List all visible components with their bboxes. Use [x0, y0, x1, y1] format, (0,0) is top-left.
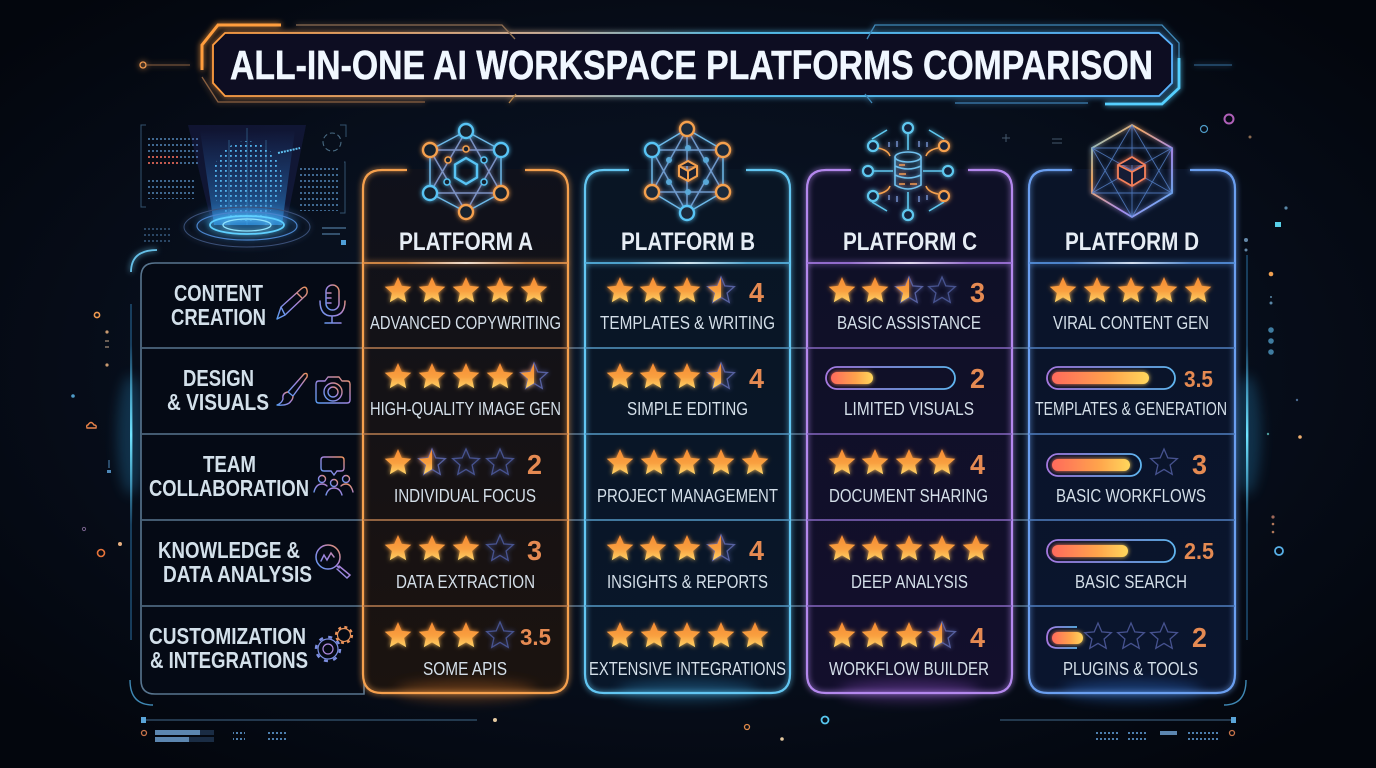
C row 3: 4	[970, 449, 985, 480]
icon: platform D hexagon cube	[1092, 125, 1172, 217]
D row 2	[1035, 366, 1227, 419]
C row 5: WORKFLOW BUILDER	[829, 658, 989, 679]
category: design and visuals: & VISUALS	[167, 389, 269, 415]
category: knowledge and data analysis: KNOWLEDGE &	[158, 537, 300, 563]
B row 1: TEMPLATES & WRITING	[600, 312, 775, 333]
D row 5: PLUGINS & TOOLS	[1063, 658, 1198, 679]
A row 5	[385, 622, 551, 679]
title banner	[140, 25, 1232, 104]
C row 4: DEEP ANALYSIS	[851, 571, 968, 592]
A row 2: HIGH-QUALITY IMAGE GEN	[370, 398, 561, 419]
category: content creation: CONTENT	[174, 280, 263, 306]
C row 2: 2	[970, 363, 985, 394]
D row 1: VIRAL CONTENT GEN	[1053, 312, 1209, 333]
D row 5: 2	[1192, 622, 1207, 653]
D row 2: 3.5	[1184, 366, 1213, 392]
D row 1	[1050, 277, 1211, 333]
C row 2: LIMITED VISUALS	[844, 398, 974, 419]
banner title text: ALL-IN-ONE AI WORKSPACE PLATFORMS COMPARISON	[230, 42, 1153, 88]
category: team collaboration: TEAM	[203, 451, 256, 477]
A row 2	[370, 363, 561, 419]
category: design and visuals: DESIGN	[183, 365, 254, 391]
column: platform C	[807, 123, 1012, 701]
category: customization and integrations: & INTEGRATIONS	[150, 647, 308, 673]
D row 3: BASIC WORKFLOWS	[1056, 485, 1206, 506]
heading: platform C: PLATFORM C	[843, 228, 977, 256]
D row 4	[1047, 538, 1214, 592]
A row 5: 3.5	[520, 624, 551, 650]
footer status bars	[141, 716, 1236, 742]
progress bar	[1047, 454, 1141, 476]
B row 3	[597, 449, 778, 506]
B row 1	[600, 277, 775, 333]
A row 4: 3	[527, 535, 542, 566]
A row 4	[385, 535, 542, 592]
category: knowledge and data analysis	[158, 537, 350, 587]
A row 4: DATA EXTRACTION	[396, 571, 535, 592]
B row 2: 4	[749, 363, 764, 394]
D row 4: 2.5	[1184, 538, 1214, 564]
category: team collaboration: COLLABORATION	[149, 475, 309, 501]
C row 3: DOCUMENT SHARING	[829, 485, 988, 506]
D row 3: 3	[1192, 449, 1207, 480]
icon: pen	[277, 287, 307, 319]
category: content creation	[171, 280, 345, 330]
progress bar	[1047, 627, 1083, 648]
category: customization and integrations	[149, 623, 352, 673]
B row 3: PROJECT MANAGEMENT	[597, 485, 778, 506]
C row 4	[829, 535, 989, 592]
progress bar	[826, 367, 955, 389]
category: design and visuals	[167, 365, 350, 415]
C row 5	[829, 622, 989, 679]
icon: platform C database circuit	[863, 123, 953, 220]
B row 4: 4	[749, 535, 764, 566]
banner frame	[140, 25, 1232, 104]
icon: microphone	[320, 285, 345, 323]
C row 1: 3	[970, 277, 985, 308]
B row 5	[589, 622, 786, 679]
heading: platform A: PLATFORM A	[399, 228, 533, 256]
icon: gears	[316, 627, 352, 661]
progress bar	[1047, 540, 1175, 562]
B row 4	[607, 535, 768, 592]
heading: platform D: PLATFORM D	[1065, 228, 1199, 256]
icon: platform B network	[645, 122, 730, 220]
ambient particles	[71, 114, 1302, 556]
hologram illustration	[141, 125, 346, 247]
C row 2	[826, 363, 985, 419]
icon: camera	[316, 377, 350, 403]
A row 1: ADVANCED COPYWRITING	[370, 312, 561, 333]
column: platform D	[1029, 125, 1235, 701]
icon: magnifier	[316, 545, 350, 578]
D row 5	[1047, 622, 1207, 679]
progress bar	[1047, 367, 1175, 389]
category: content creation: CREATION	[171, 304, 266, 330]
C row 3	[829, 449, 988, 506]
category: team collaboration	[149, 451, 353, 501]
A row 5: SOME APIS	[423, 658, 507, 679]
column: platform B	[585, 122, 790, 701]
heading: platform B: PLATFORM B	[621, 228, 755, 256]
category: knowledge and data analysis: DATA ANALYSIS	[163, 561, 312, 587]
D row 3	[1047, 449, 1207, 506]
A row 3	[385, 449, 542, 506]
B row 5: EXTENSIVE INTEGRATIONS	[589, 658, 786, 679]
B row 4: INSIGHTS & REPORTS	[607, 571, 768, 592]
B row 1: 4	[749, 277, 764, 308]
column: platform A	[363, 124, 568, 701]
category: customization and integrations: CUSTOMIZATION	[149, 623, 306, 649]
icon: platform A network	[423, 124, 508, 219]
D row 4: BASIC SEARCH	[1075, 571, 1187, 592]
C row 5: 4	[970, 622, 985, 653]
icon: paint brush	[277, 373, 307, 405]
D row 2: TEMPLATES & GENERATION	[1035, 398, 1227, 419]
C row 1	[829, 277, 985, 333]
B row 2: SIMPLE EDITING	[627, 398, 748, 419]
icon: team	[314, 457, 353, 495]
B row 2	[607, 363, 764, 419]
C row 1: BASIC ASSISTANCE	[837, 312, 981, 333]
A row 3: INDIVIDUAL FOCUS	[394, 485, 536, 506]
A row 3: 2	[527, 449, 542, 480]
side brackets and rails	[117, 250, 1261, 705]
panel: feature categories	[141, 263, 1235, 694]
A row 1	[370, 277, 561, 333]
